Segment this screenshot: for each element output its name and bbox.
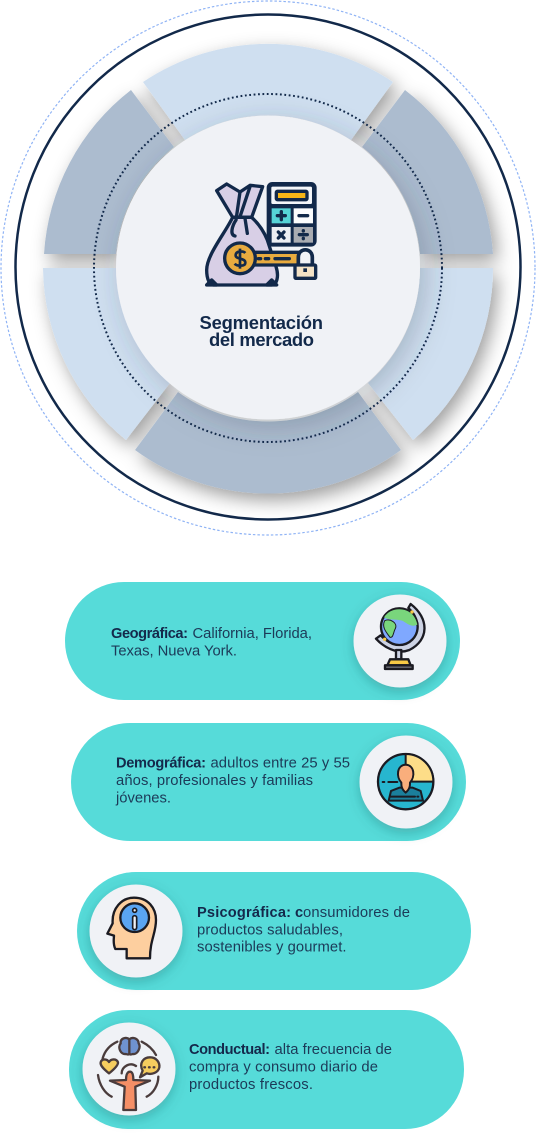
panel: Psicográfica xyxy=(77,872,471,990)
text: Conductual: productos frescos. xyxy=(189,1077,313,1093)
heading: Segmentación del mercado: del mercado xyxy=(209,329,314,350)
panel: Conductual xyxy=(69,1010,464,1129)
text: Psicográfica: Psicográfica: xyxy=(197,905,291,921)
icon: globe xyxy=(376,604,424,669)
text: Psicográfica: productos saludables, xyxy=(197,922,343,938)
outer dotted ring xyxy=(1,1,535,535)
center circle xyxy=(116,116,420,420)
text: Psicográfica xyxy=(197,905,410,956)
ring segments xyxy=(43,44,493,494)
navy ring xyxy=(16,14,520,520)
text: Demográfica: adultos entre 25 y 55 xyxy=(210,756,350,772)
text: Geográfica xyxy=(111,626,312,660)
panel: Demográfica xyxy=(71,723,466,841)
heading: Segmentación del mercado xyxy=(200,312,323,350)
text: Geográfica: California, Florida, xyxy=(192,626,312,642)
text: Demográfica: Demográfica: xyxy=(116,756,206,772)
text: Conductual: compra y consumo diario de xyxy=(189,1060,378,1076)
text: Demográfica: jóvenes. xyxy=(115,790,171,806)
text: Conductual: alta frecuencia de xyxy=(274,1042,392,1058)
icon: money bag, key and calculator xyxy=(207,184,316,285)
text: Geográfica: Texas, Nueva York. xyxy=(111,644,237,660)
icon: brain, heart, speech bubble and person xyxy=(98,1038,159,1110)
icon: head with information xyxy=(107,898,156,958)
text: Psicográfica: onsumidores de xyxy=(303,905,410,921)
icon: person profile xyxy=(378,754,433,809)
heading: Segmentación del mercado: Segmentación xyxy=(200,312,323,333)
text: Demográfica xyxy=(115,756,350,806)
text: Conductual: Conductual: xyxy=(189,1042,270,1058)
inner dotted ring xyxy=(94,94,442,442)
panel: Geográfica xyxy=(65,582,460,700)
text: Psicográfica: c xyxy=(295,905,303,921)
text: Geográfica: Geográfica: xyxy=(111,626,188,642)
text: Psicográfica: sostenibles y gourmet. xyxy=(197,940,346,956)
text: Conductual xyxy=(189,1042,392,1093)
text: Demográfica: años, profesionales y familias xyxy=(116,773,313,789)
